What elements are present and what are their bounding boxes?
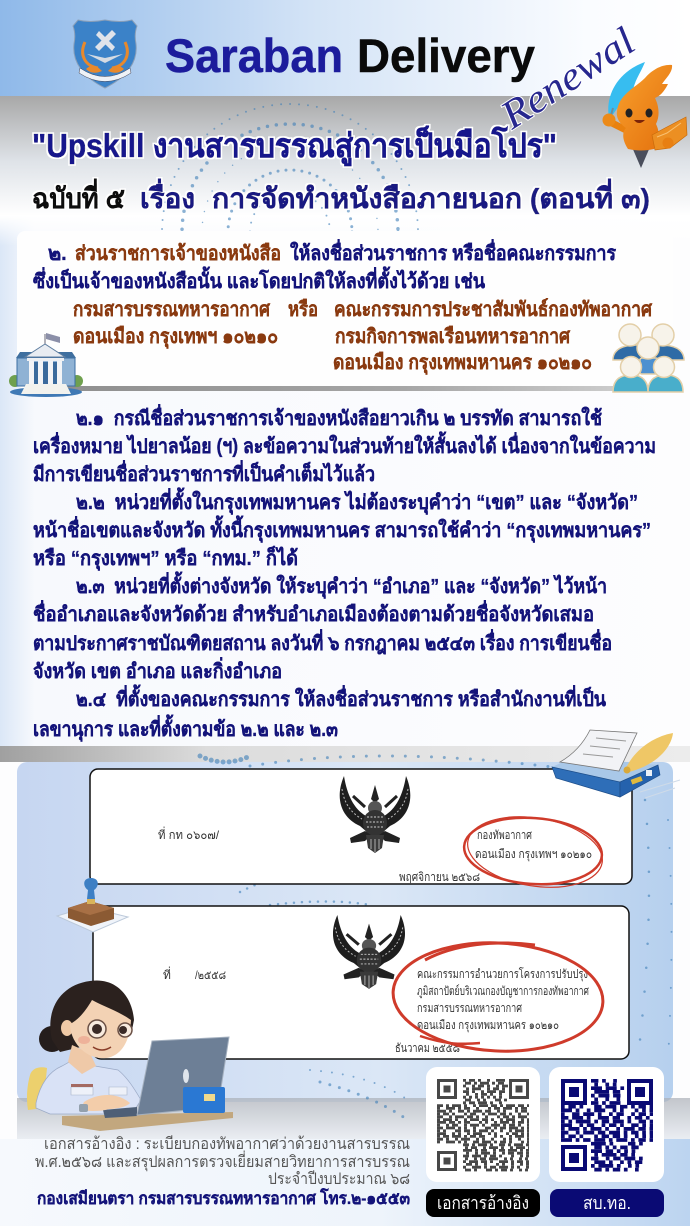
- icon: rubber stamp: [57, 878, 128, 932]
- renewal script: Renewal: [491, 18, 643, 138]
- headline: Upskill: "Upskill งานสารบรรณสู่การเป็นมือโปร": [32, 125, 557, 167]
- body text: sections 2.1 to 2.4: ชื่ออำเภอและจังหวัดด้วย สำหรับอำเภอเมืองต้องตามด้วยชื่อจังหวัดเสมอ: [33, 599, 594, 626]
- example addresses: ดอนเมือง กรุงเทพฯ ๑๐๒๑๐: [73, 325, 278, 349]
- body text: sections 2.1 to 2.4: จังหวัด เขต อำเภอ และกิ่งอำเภอ: [33, 656, 282, 683]
- footer reference text: [35, 1135, 410, 1208]
- example addresses: [73, 298, 653, 375]
- button: website: สบ.ทอ.: [583, 1193, 631, 1213]
- illustration: officer at laptop: [27, 980, 233, 1131]
- QR code: reference document: [426, 1067, 540, 1182]
- decorative dotted arcs: lower panel: [200, 756, 672, 1118]
- body text: sections 2.1 to 2.4: เลขานุการ และที่ตั้งตามข้อ ๒.๒ และ ๒.๓: [33, 714, 338, 742]
- footer reference text: ประจำปีงบประมาณ ๖๘: [268, 1170, 410, 1188]
- shirt: [36, 1056, 141, 1114]
- button: reference document: เอกสารอ้างอิง: [437, 1193, 529, 1213]
- document text: ภูมิสถาปัตย์บริเวณกองบัญชาการกองทัพอากาศ: [417, 984, 589, 999]
- body text: sections 2.1 to 2.4: ๒.๔ ที่ตั้งของคณะกรรมการ ให้ลงชื่อส่วนราชการ หรือสำนักงานที่เป็น: [76, 684, 606, 711]
- document text: กรมสารบรรณทหารอากาศ: [417, 1001, 522, 1015]
- document text: พฤศจิกายน ๒๕๖๘: [399, 870, 480, 884]
- body text: sections 2.1 to 2.4: หรือ “กรุงเทพฯ” หรือ “กทม.” ก็ได้: [33, 545, 298, 571]
- title: Saraban Delivery: Delivery: [357, 29, 535, 82]
- button: website: [550, 1189, 664, 1217]
- document text: ที่: [163, 966, 171, 982]
- contact line: กองเสมียนตรา กรมสารบรรณทหารอากาศ โทร.๒-๑๕๕๓: [37, 1188, 410, 1208]
- chair: [27, 1067, 47, 1110]
- document text: ดอนเมือง กรุงเทพมหานคร ๑๐๒๑๐: [417, 1018, 559, 1033]
- document sample 1: [90, 769, 632, 896]
- subtitle: issue 5: ฉบับที่ ๕: [32, 178, 125, 214]
- body text: sections 2.1 to 2.4: ๒.๑ กรณีชื่อส่วนราชการเจ้าของหนังสือยาวเกิน ๒ บรรทัด สามารถใช้: [76, 403, 602, 430]
- icon: paper tray with quill: [552, 730, 680, 798]
- decorative dotted arcs: [162, 104, 418, 360]
- example addresses: กรมกิจการพลเรือนทหารอากาศ: [335, 325, 571, 348]
- button: reference document: [426, 1189, 540, 1217]
- body text: sections 2.1 to 2.4: มีการเขียนชื่อส่วนราชการที่เป็นคำเต็มไว้แล้ว: [33, 459, 375, 486]
- hair back and bun: [39, 1026, 65, 1052]
- body text: sections 2.1 to 2.4: ตามประกาศราชบัณฑิตยสถาน ลงวันที่ ๖ กรกฎาคม ๒๕๔๓ เรื่อง การเขียนชื่อ: [33, 628, 612, 655]
- document text: [158, 826, 592, 884]
- example addresses: กรมสารบรรณทหารอากาศ: [73, 299, 271, 321]
- panel: section 2 header: [9, 231, 684, 397]
- subtitle: issue 5: [32, 178, 650, 214]
- icon: garuda emblem: [340, 776, 410, 853]
- section 2 paragraph: [33, 238, 616, 293]
- section 2 paragraph: ส่วนราชการเจ้าของหนังสือ: [75, 242, 281, 265]
- icon: garuda emblem: [333, 915, 405, 989]
- hands: [80, 1095, 130, 1111]
- document text: ธันวาคม ๒๕๕๘: [395, 1041, 460, 1055]
- section 2 paragraph: ๒.: [48, 243, 67, 265]
- red hand-drawn circle: [390, 938, 606, 1056]
- icon: mascot: [602, 62, 687, 168]
- document sample 2: [93, 906, 629, 1059]
- red hand-drawn circle: [462, 808, 607, 896]
- document text: กองทัพอากาศ: [477, 828, 532, 842]
- desk: [62, 1112, 233, 1131]
- body text: sections 2.1 to 2.4: ๒.๓ หน่วยที่ตั้งต่างจังหวัด ให้ระบุคำว่า “อำเภอ” และ “จังหวัด” ไว้หน้า: [76, 571, 607, 599]
- document text: /๒๕๕๘: [195, 968, 226, 982]
- document text: คณะกรรมการอำนวยการโครงการปรับปรุง: [417, 967, 588, 982]
- laptop: [103, 1107, 137, 1118]
- section 2 paragraph: ซึ่งเป็นเจ้าของหนังสือนั้น และโดยปกติให้ลงที่ตั้งไว้ด้วย เช่น: [33, 266, 485, 293]
- subtitle: issue 5: เรื่อง: [140, 178, 195, 214]
- body text: sections 2.1 to 2.4: [33, 403, 656, 742]
- document text: ที่ กท ๐๖๐๗/: [158, 826, 220, 842]
- blue box: [183, 1087, 225, 1113]
- footer reference text: เอกสารอ้างอิง : ระเบียบกองทัพอากาศว่าด้วยงานสารบรรณ: [44, 1135, 410, 1153]
- example addresses: ดอนเมือง กรุงเทพมหานคร ๑๐๒๑๐: [333, 351, 592, 375]
- QR code: website: [549, 1067, 664, 1182]
- document text: ดอนเมือง กรุงเทพฯ ๑๐๒๑๐: [475, 847, 592, 862]
- neck: [68, 1045, 96, 1074]
- example addresses: หรือ: [288, 298, 318, 321]
- title: Saraban Delivery: Saraban: [165, 29, 343, 82]
- example addresses: คณะกรรมการประชาสัมพันธ์กองทัพอากาศ: [334, 298, 653, 321]
- section 2 paragraph: ให้ลงชื่อส่วนราชการ หรือชื่อคณะกรรมการ: [290, 238, 616, 265]
- footer reference text: พ.ศ.๒๕๖๘ และสรุปผลการตรวจเยี่ยมสายวิทยาการสารบรรณ: [35, 1150, 410, 1172]
- document text: [163, 966, 589, 1055]
- header: logo shield: [73, 20, 137, 88]
- icon: government building: [9, 333, 83, 397]
- icon: group of people: [613, 324, 684, 392]
- body text: sections 2.1 to 2.4: ๒.๒ หน่วยที่ตั้งในกรุงเทพมหานคร ไม่ต้องระบุคำว่า “เขต” และ “จังหวัด”: [76, 487, 638, 515]
- title: Saraban Delivery: [165, 29, 535, 82]
- subtitle: issue 5: การจัดทำหนังสือภายนอก (ตอนที่ ๓): [212, 178, 650, 214]
- face: [61, 1020, 73, 1036]
